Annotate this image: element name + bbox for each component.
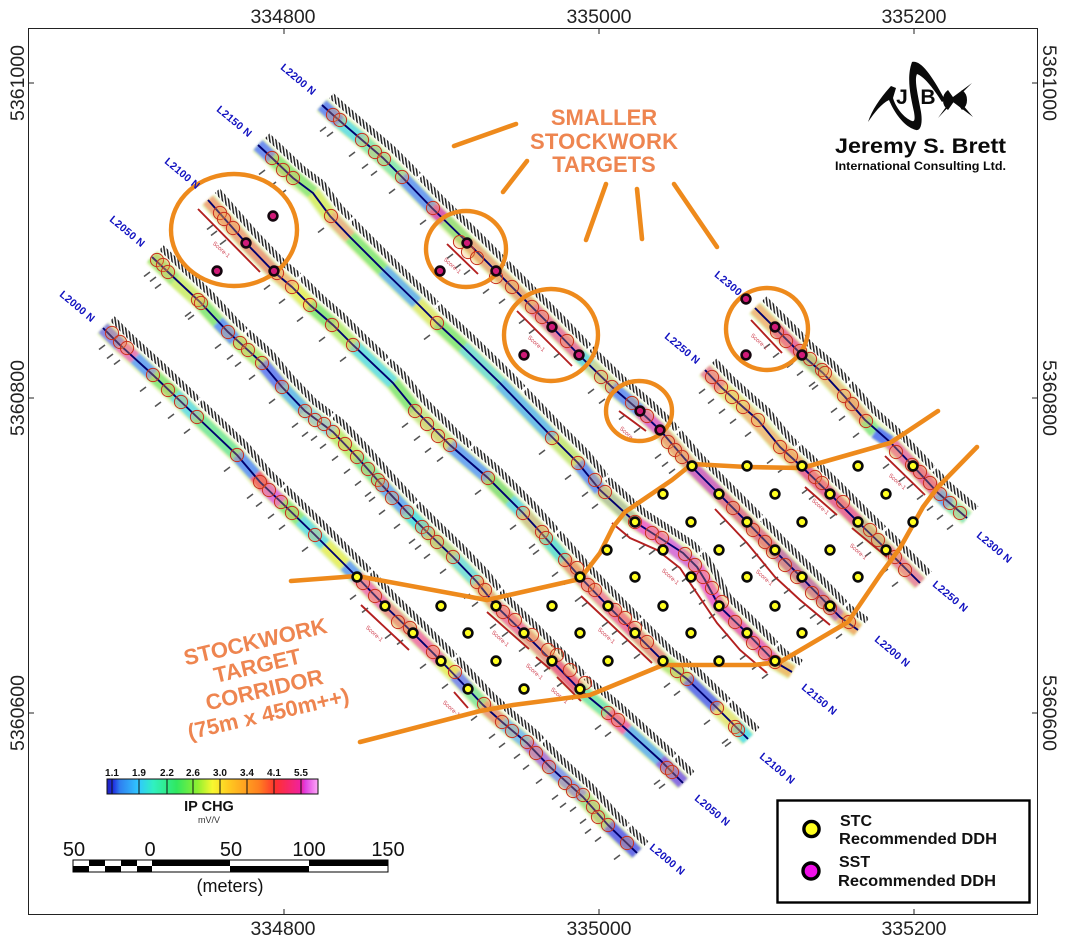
survey line labels: L2100 N (162, 156, 202, 192)
scale numbers: 0 (144, 839, 156, 861)
scale numbers: 50 (63, 839, 85, 861)
survey line labels: L2100 N (757, 751, 797, 787)
ramp values: 1.9 (132, 768, 146, 779)
hatched station ticks (112, 96, 976, 844)
drill hole legend (778, 800, 1030, 902)
ramp title: IP CHG (184, 799, 234, 815)
survey line labels: L2250 N (662, 331, 702, 367)
heading: smaller stockwork targets: TARGETS (552, 152, 656, 177)
logo subtitle: International Consulting Ltd. (835, 161, 1006, 173)
survey line labels: L2200 N (872, 634, 912, 670)
small target line labels: Score-1 (524, 663, 544, 682)
map frame and axes: 334800 (250, 918, 316, 940)
survey line labels: L2250 N (930, 579, 970, 615)
logo letters: J (896, 86, 908, 109)
map frame and axes: 5361000 (1038, 45, 1060, 121)
ramp values: 2.2 (160, 768, 174, 779)
survey line labels: L2200 N (278, 62, 318, 98)
STC recommended drill holes (353, 462, 917, 693)
map frame and axes: 335200 (881, 918, 947, 940)
heading: stockwork target corridor (181, 613, 352, 744)
colour ramp (107, 779, 318, 794)
company logo: B (920, 86, 936, 109)
survey line labels: L2150 N (214, 104, 254, 140)
heading: stockwork target corridor: CORRIDOR (203, 664, 326, 715)
anomaly rings (99, 108, 967, 859)
logo name: Jeremy S. Brett (835, 135, 1006, 158)
small target line labels: Score-1 (490, 630, 510, 649)
survey centre lines (103, 105, 967, 853)
company logo (835, 62, 1006, 173)
small target line labels: Score-1 (526, 335, 546, 354)
ramp values: 3.0 (213, 768, 227, 779)
dark red target lines (198, 209, 925, 708)
small target line labels: Score-1 (810, 498, 830, 517)
heading: smaller stockwork targets: STOCKWORK (530, 129, 678, 154)
small target line labels: Score-1 (549, 687, 569, 706)
logo compass star (938, 83, 973, 118)
map frame and axes: 5360800 (1038, 360, 1060, 436)
survey line labels: L2300 N (974, 530, 1014, 566)
heading: stockwork target corridor: STOCKWORK (181, 613, 329, 670)
map frame and axes: 5361000 (7, 45, 29, 121)
small target line labels: Score-1 (848, 543, 868, 562)
scale numbers: 100 (292, 839, 326, 861)
ramp values (105, 768, 308, 779)
orange callout rays (454, 124, 717, 247)
ramp values: 2.6 (186, 768, 200, 779)
map frame and axes: 335200 (881, 6, 947, 28)
logo compass disc (943, 90, 967, 110)
scale numbers (63, 839, 405, 861)
survey line labels: L2050 N (692, 793, 732, 829)
small target line labels: Score-1 (441, 700, 461, 719)
scale bar (63, 839, 405, 896)
legend: SST label: Recommended DDH (838, 873, 996, 890)
map frame and axes: 5360600 (1038, 675, 1060, 751)
survey line labels: L2150 N (799, 682, 839, 718)
heading: smaller stockwork targets (530, 105, 678, 177)
scale numbers: 150 (371, 839, 405, 861)
heading: smaller stockwork targets: SMALLER (551, 105, 657, 130)
heading: stockwork target corridor: (75m x 450m++) (185, 683, 352, 744)
small target line labels: Score-1 (754, 569, 774, 588)
survey line labels: L2300 (712, 269, 744, 299)
legend: SST label: SST (839, 854, 870, 871)
map frame and axes: 5360600 (7, 675, 29, 751)
map frame and axes: 335000 (566, 6, 632, 28)
legend: STC label: STC (840, 813, 872, 830)
orange corridor outline (291, 411, 977, 742)
small target line labels: Score-1 (887, 473, 907, 492)
heading: stockwork target corridor: TARGET (211, 643, 304, 688)
logo swoosh mark (868, 62, 945, 130)
small target line labels: Score-1 (596, 627, 616, 646)
legend: SST symbol (803, 863, 819, 879)
ramp units: mV/V (198, 815, 220, 825)
small target line labels (211, 241, 907, 719)
small target line labels: Score-1 (660, 568, 680, 587)
IP chargeability survey lines (99, 96, 976, 859)
legend: STC symbol (804, 821, 819, 837)
colour legend: IP CHG (105, 768, 318, 825)
map frame and axes: 5360800 (7, 360, 29, 436)
small target line labels: Score-1 (442, 257, 462, 276)
map frame and axes: 335000 (566, 918, 632, 940)
ramp values: 1.1 (105, 768, 119, 779)
survey line labels: L2000 N (647, 842, 687, 878)
ramp values: 4.1 (267, 768, 281, 779)
survey line labels: L2050 N (107, 214, 147, 250)
ramp values: 5.5 (294, 768, 308, 779)
ramp values: 3.4 (240, 768, 254, 779)
survey line labels (57, 62, 1014, 878)
small target line labels: Score-1 (749, 333, 769, 352)
small target line labels: Score-1 (211, 241, 231, 260)
legend: STC label: Recommended DDH (839, 831, 997, 848)
scale unit: (meters) (196, 876, 264, 896)
small target line labels: Score-1 (618, 426, 638, 445)
SST recommended drill holes (213, 212, 806, 434)
survey line labels: L2000 N (57, 289, 97, 325)
chargeability colour bands (103, 105, 967, 853)
scale numbers: 50 (220, 839, 242, 861)
chargeability halo (103, 105, 967, 853)
map frame and axes: 334800 (250, 6, 316, 28)
orange target circles (171, 174, 808, 441)
small target line labels: Score-1 (364, 625, 384, 644)
